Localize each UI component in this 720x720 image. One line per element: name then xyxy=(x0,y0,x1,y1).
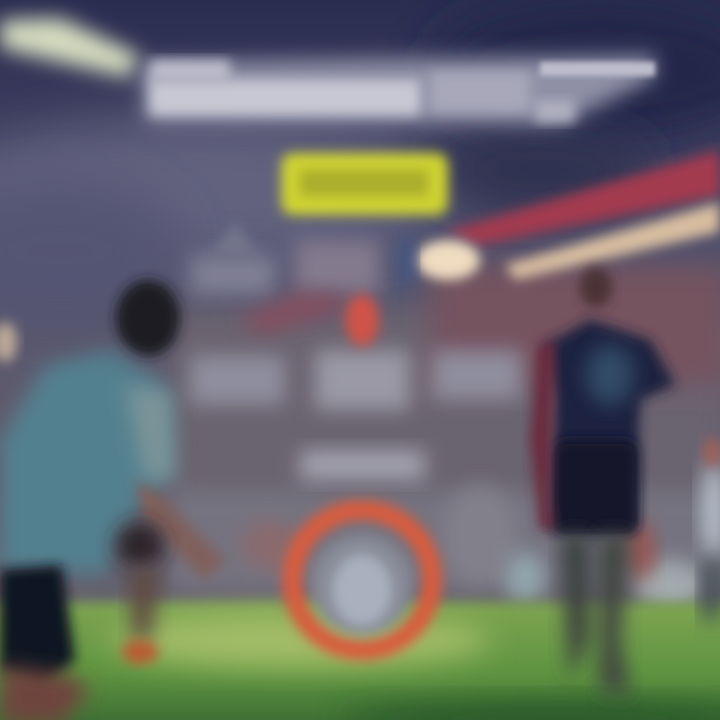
left edge light xyxy=(0,322,17,362)
stadium roof and lights xyxy=(398,150,720,282)
background: crowd xyxy=(170,265,720,610)
title text block (illegible, blurred) xyxy=(0,18,655,125)
player right xyxy=(530,267,675,695)
circular emblem xyxy=(292,510,432,650)
far right player xyxy=(702,438,720,620)
player left xyxy=(0,280,225,720)
grass pitch xyxy=(0,602,720,720)
central info boxes xyxy=(190,222,522,480)
yellow badge xyxy=(281,153,448,215)
